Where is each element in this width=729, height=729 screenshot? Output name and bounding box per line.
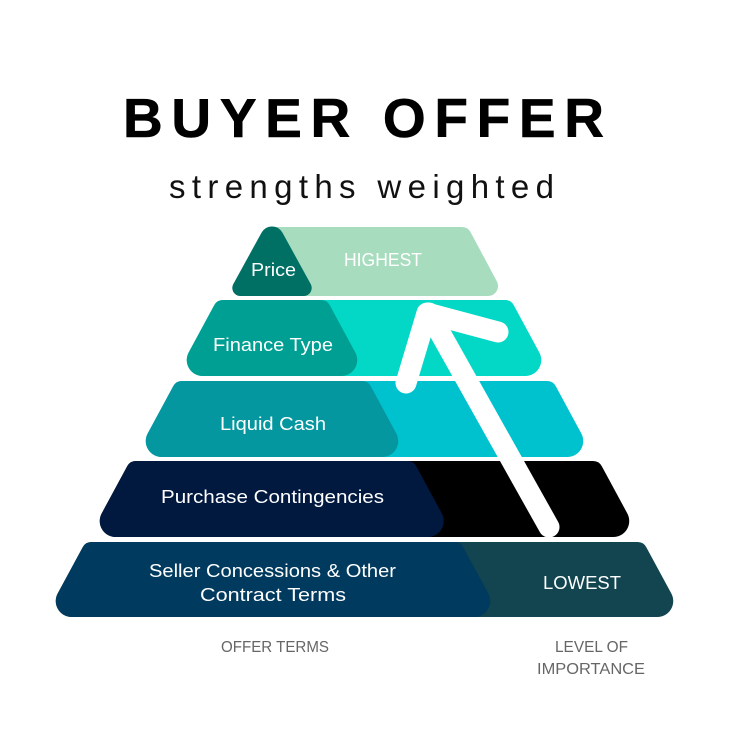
column label: level of importance — [537, 639, 645, 678]
column label: offer terms: OFFER TERMS — [221, 639, 329, 656]
tier 1 term block — [232, 227, 312, 296]
column label: level of importance: LEVEL OF — [555, 639, 628, 656]
subtitle: strengths weighted — [169, 168, 554, 205]
tier 5 term block — [56, 542, 490, 617]
column label: level of importance: IMPORTANCE — [537, 661, 645, 678]
pyramid tier 4: purchase contingencies — [100, 461, 629, 537]
label: Finance Type: Finance Type — [213, 335, 333, 355]
pyramid tier 5: seller concessions — [56, 542, 673, 617]
label: Price: Price — [251, 260, 296, 280]
label: Seller Concessions and Other Contract Terms: Seller Concessions & Other — [149, 561, 396, 581]
tier 5 background — [56, 542, 673, 617]
tier 3 term block — [146, 381, 398, 457]
pyramid tier 1: price — [232, 227, 498, 296]
label: highest: HIGHEST — [344, 250, 422, 270]
tier 4 term block — [100, 461, 444, 537]
label: Purchase Contingencies: Purchase Contingencies — [161, 487, 384, 507]
label: Liquid Cash: Liquid Cash — [220, 414, 326, 434]
arrow: lowest to highest — [406, 313, 549, 527]
label: lowest: LOWEST — [543, 573, 621, 593]
tier 1 background: highest — [242, 227, 498, 296]
tier 2 background — [187, 300, 541, 376]
pyramid tier 3: liquid cash — [146, 381, 583, 457]
pyramid tier 2: finance type — [187, 300, 541, 376]
title: BUYER OFFER — [123, 87, 604, 149]
tier 2 term block — [187, 300, 357, 376]
label: Seller Concessions and Other Contract Terms: Contract Terms — [200, 585, 346, 605]
tier 4 background — [100, 461, 629, 537]
label: Seller Concessions and Other Contract Terms — [149, 561, 396, 605]
tier 3 background — [146, 381, 583, 457]
